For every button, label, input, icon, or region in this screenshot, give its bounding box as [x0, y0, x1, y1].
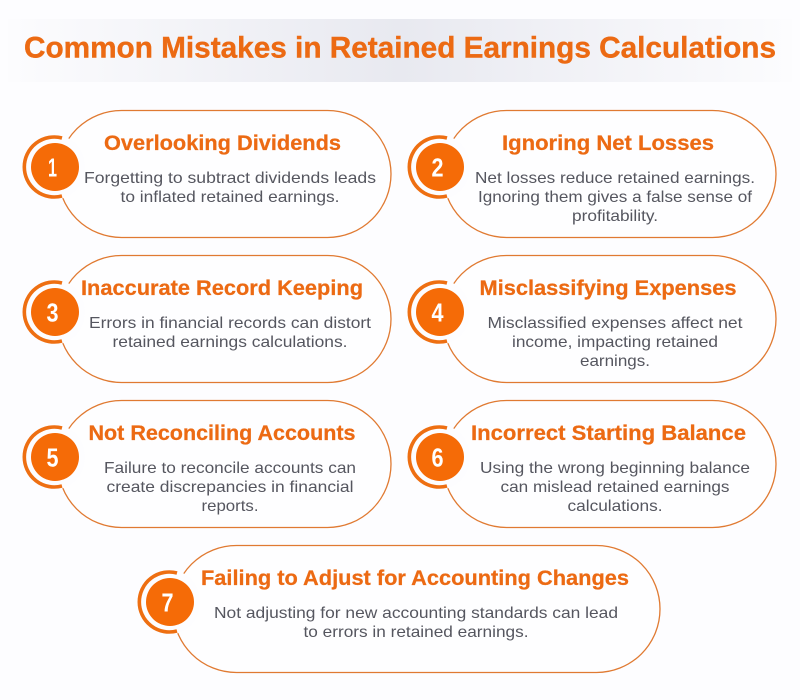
- panel: not reconciling accounts: [19, 400, 391, 528]
- icon: number 7: 7: [162, 588, 174, 618]
- heading: Failing to Adjust for Accounting Changes: [201, 567, 629, 590]
- panel: incorrect starting balance: [404, 400, 776, 528]
- panel: misclassifying expenses: earnings.: [580, 353, 650, 370]
- panel: ignoring net losses: [404, 110, 776, 238]
- body text: Net losses reduce retained earnings.: [475, 170, 755, 187]
- icon: number 4: [404, 279, 470, 345]
- panel: not reconciling accounts: reports.: [202, 498, 258, 515]
- panel: inaccurate record keeping: [19, 256, 391, 382]
- panel: incorrect starting balance: calculations.: [568, 498, 662, 515]
- body text: Not adjusting for new accounting standards can lead: [214, 605, 618, 622]
- body text: Misclassified expenses affect net: [488, 315, 743, 332]
- heading: Incorrect Starting Balance: [471, 422, 746, 445]
- icon: number 2: 2: [432, 152, 444, 182]
- panel: inaccurate record keeping: retained earnings calculations.: [112, 334, 348, 351]
- panel: incorrect starting balance: can mislead retained earnings: [500, 479, 730, 496]
- heading: Misclassifying Expenses: [480, 277, 736, 300]
- heading: Ignoring Net Losses: [502, 132, 714, 155]
- heading: Inaccurate Record Keeping: [81, 277, 363, 300]
- panel: overlooking dividends: to inflated retained earnings.: [120, 189, 340, 206]
- heading: Not Reconciling Accounts: [88, 422, 356, 445]
- icon: number 4: 4: [432, 298, 444, 328]
- icon: number 5: [19, 424, 85, 490]
- icon: number 6: 6: [432, 442, 444, 472]
- icon: number 5: 5: [46, 442, 58, 472]
- panel: failing to adjust for accounting changes: to errors in retained earnings.: [304, 624, 528, 641]
- icon: number 7: [134, 569, 200, 635]
- body text: Errors in financial records can distort: [89, 315, 372, 332]
- icon: number 2: [404, 134, 470, 200]
- title: Common Mistakes in Retained Earnings Calculations: [24, 32, 776, 64]
- title banner: [8, 19, 792, 82]
- icon: number 1: [19, 134, 85, 200]
- panel: ignoring net losses: profitability.: [572, 208, 658, 225]
- icon: number 3: [19, 279, 85, 345]
- panel: overlooking dividends: [19, 110, 391, 238]
- panel: not reconciling accounts: create discrepancies in financial: [106, 479, 354, 496]
- icon: number 1: 1: [48, 152, 57, 182]
- panel: ignoring net losses: Ignoring them gives a false sense of: [478, 189, 753, 206]
- panel: misclassifying expenses: [404, 256, 776, 382]
- panel: failing to adjust for accounting changes: [134, 546, 660, 672]
- icon: number 3: 3: [46, 298, 58, 328]
- icon: number 6: [404, 424, 470, 490]
- body text: Using the wrong beginning balance: [480, 460, 750, 477]
- panel: misclassifying expenses: income, impacting retained: [512, 334, 718, 351]
- body text: Failure to reconcile accounts can: [104, 460, 356, 477]
- body text: Forgetting to subtract dividends leads: [84, 170, 376, 187]
- heading: Overlooking Dividends: [104, 132, 341, 155]
